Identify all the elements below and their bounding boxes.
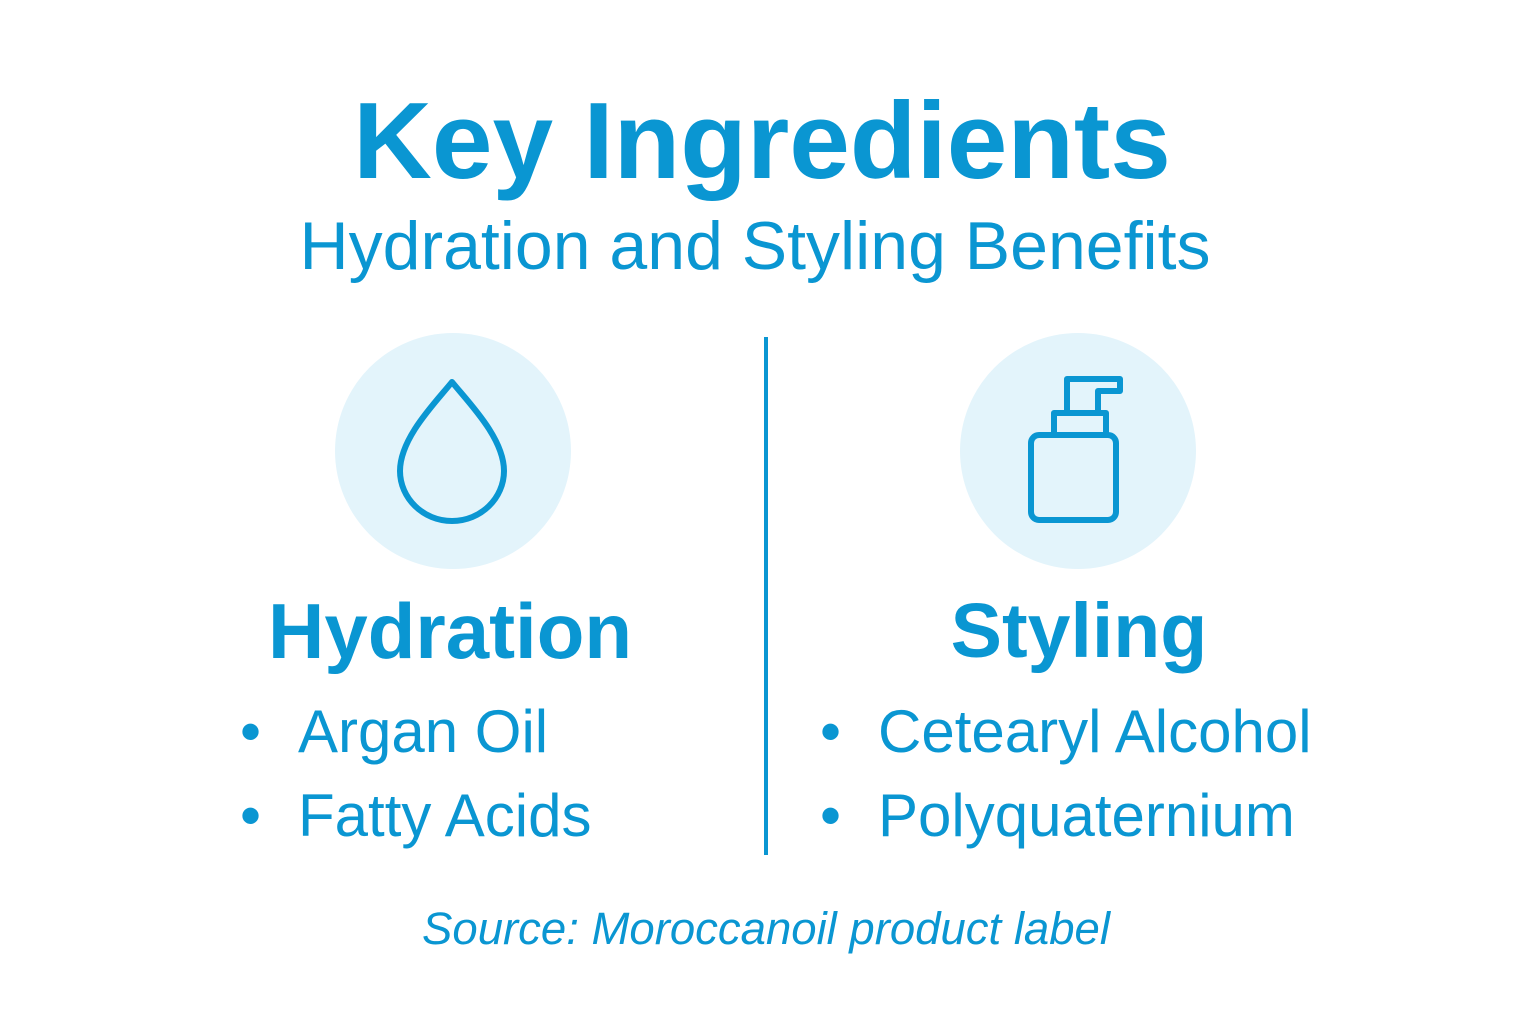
icon: pump bottle [960,333,1196,569]
list: styling ingredients: Cetearyl Alcohol [878,698,1312,765]
list: styling ingredients: • [820,698,841,765]
list: hydration ingredients [240,698,591,849]
title: Key Ingredients [353,80,1171,202]
list: hydration ingredients: Argan Oil [298,698,548,765]
source note: Source: Moroccanoil product label [422,903,1110,954]
divider [764,337,768,855]
list: styling ingredients [820,698,1312,849]
icon: water drop [335,333,571,569]
list: hydration ingredients: • [240,698,261,765]
list: hydration ingredients: • [240,782,261,849]
heading: Hydration: Hydration [268,587,632,675]
list: styling ingredients: Polyquaternium [878,782,1295,849]
list: styling ingredients: • [820,782,841,849]
subtitle: Hydration and Styling Benefits [300,208,1210,284]
heading: Styling: Styling [951,588,1207,674]
list: hydration ingredients: Fatty Acids [298,782,591,849]
